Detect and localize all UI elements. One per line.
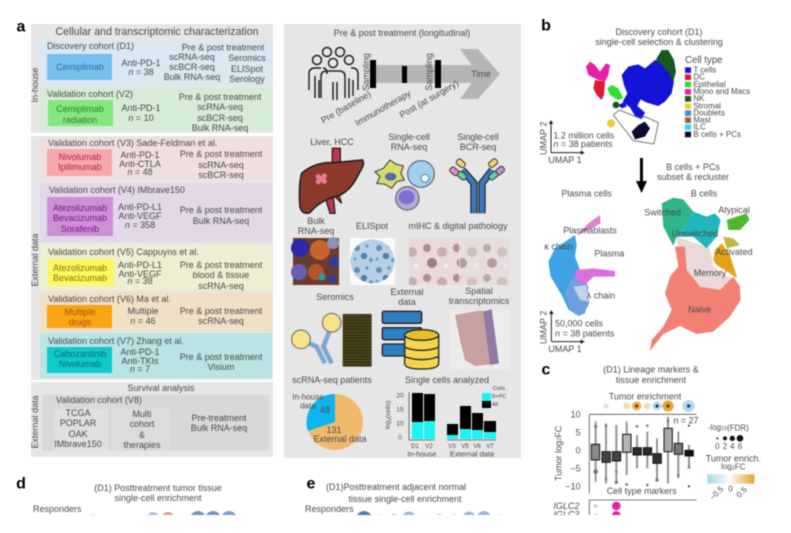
UMAP: discovery cohort clusters <box>586 50 676 144</box>
cohort V3: n = 48 <box>127 167 153 177</box>
assay labels lower: data <box>398 297 416 307</box>
cohort V5: n = 38 <box>127 276 153 286</box>
cohort V5: Bevacizumab <box>53 273 107 283</box>
cohort V6: Pre & post treatment <box>180 306 263 316</box>
panel label c: c <box>542 362 551 378</box>
cohort V3: scRNA-seq <box>198 160 244 170</box>
cohort D1: Seromics <box>228 53 266 63</box>
stacked bar chart: External data <box>450 450 495 458</box>
cohort V5: Pre & post treatment <box>180 260 263 270</box>
cell type markers dot plot: IGLC3 <box>553 509 579 519</box>
cohort V3: Ipilimumab <box>58 162 102 172</box>
cohort D1: Anti-PD-1 <box>121 58 161 68</box>
assay labels: mIHC & digital pathology <box>408 221 508 231</box>
cohort V6 <box>40 292 272 331</box>
UMAP: B cells: Unswitched <box>672 228 718 238</box>
heading: pre and post treatment: Pre & post treatment (longitudinal) <box>334 28 470 38</box>
cohort D1: Cemiplimab <box>56 62 104 72</box>
heading: cellular and transcriptomic characterization: Cellular and transcriptomic characterization <box>55 26 259 38</box>
cohort V2: n = 10 <box>128 113 154 123</box>
legend: FDR size and enrichment colour: Tumor enrich. <box>706 453 761 463</box>
subset and recluster label: B cells + PCs <box>666 162 720 172</box>
stacked bar chart: log <box>384 421 392 429</box>
legend: cell type: Mono and Macs <box>693 87 750 96</box>
panel: external data cohorts <box>30 136 273 380</box>
image: mIHC and digital pathology <box>409 238 510 285</box>
stacked bar chart: (cells) <box>384 401 392 418</box>
cohort V3: Anti-PD-1 <box>120 150 160 160</box>
panel: survival analysis: POPLAR <box>60 418 97 428</box>
legend: cell type: Mast <box>693 115 711 124</box>
stacked bar chart: V3 <box>448 444 456 450</box>
side label: in-house: In-house <box>30 67 40 103</box>
cohort V2: Validation cohort (V2) <box>47 89 133 99</box>
tumor enrichment dots <box>603 400 695 412</box>
cohort V7 <box>40 333 272 378</box>
panel label a: a <box>17 18 26 36</box>
panel c title: tissue enrichment <box>616 375 687 385</box>
legend: FDR size and enrichment colour: −0.5 <box>708 484 726 502</box>
pie chart: 131 <box>326 425 342 435</box>
cohort V4: Sorafenib <box>61 224 99 234</box>
icon: antibody <box>449 158 505 213</box>
cohort V4: Atezolizumab <box>53 203 107 213</box>
stacked bar chart: 15 <box>396 406 404 414</box>
UMAP axes: discovery cohort: UMAP 1 <box>548 155 582 165</box>
cohort V2: Anti-PD-1 <box>121 103 161 113</box>
cohort V2: Cemiplimab <box>56 104 104 114</box>
cohort V7: Pre & post treatment <box>180 352 263 362</box>
legend: FDR size and enrichment colour <box>706 423 761 502</box>
panel: longitudinal sampling and assays <box>284 24 521 458</box>
cohort V5: Anti-PD-L1 <box>118 260 162 270</box>
bar chart legend: B+PC <box>492 394 507 400</box>
UMAP axes: plasma cells: UMAP 2 <box>538 311 548 344</box>
UMAP: B cells: B cells <box>691 189 718 199</box>
panel d responders dots <box>33 504 237 527</box>
panel e title <box>326 482 466 504</box>
cohort D1: Pre & post treatment <box>182 42 265 52</box>
sampling labels: Pre (baseline) <box>319 89 373 125</box>
box plot: tumor log2FC: −5 <box>570 463 581 473</box>
stacked bar chart <box>384 386 507 458</box>
panel: survival analysis: Validation cohort (V8) <box>56 395 142 405</box>
cohort V4 <box>40 183 272 242</box>
UMAP: B cells <box>644 189 752 352</box>
UMAP axes: plasma cells <box>538 310 615 354</box>
panel b title <box>595 27 723 47</box>
legend: FDR size and enrichment colour: 0 <box>715 442 720 451</box>
assay labels lower <box>316 286 510 307</box>
bar chart legend: Cells <box>493 386 505 392</box>
cohort V3: Validation cohort (V3) Sade-Feldman et al. <box>48 138 217 148</box>
UMAP: plasma cells: Plasma <box>594 249 624 259</box>
panel: survival analysis: & <box>139 430 145 440</box>
panel: survival analysis: cohort <box>129 419 155 429</box>
cohort V2: scBCR-seq <box>197 113 243 123</box>
cell type markers dot plot: IGLC2 <box>553 501 579 511</box>
assay labels: BCR-seq <box>460 142 496 152</box>
UMAP axes: discovery cohort: UMAP 2 <box>538 122 548 155</box>
legend: FDR size and enrichment colour: 4 <box>730 442 735 451</box>
stacked bar chart: In-house <box>407 450 437 458</box>
time arrow: Time <box>471 69 491 79</box>
panel: survival analysis: External data <box>30 395 40 449</box>
stacked bar chart: V6 <box>473 444 481 450</box>
sampling labels <box>319 53 460 128</box>
legend: FDR size and enrichment colour: -log <box>708 423 721 432</box>
UMAP axes: discovery cohort: n = 38 patients <box>553 139 613 149</box>
cohort D1: Serology <box>229 74 265 84</box>
legend: cell type <box>685 55 750 139</box>
UMAP axes: plasma cells: 50,000 cells <box>555 318 603 328</box>
legend: FDR size and enrichment colour: 2 <box>732 465 735 471</box>
legend: FDR size and enrichment colour: FC <box>735 462 746 471</box>
assay labels <box>298 132 508 236</box>
image: spatial transcriptomics <box>450 309 510 369</box>
panel d title: (D1) Posttreatment tumor tissue <box>94 483 222 493</box>
panel d title: single-cell enrichment <box>114 493 202 503</box>
cohort V5: scRNA-seq <box>198 281 244 291</box>
assay labels lower: Seromics <box>316 292 354 302</box>
bar chart legend <box>482 386 507 408</box>
cohort V4: Bulk RNA-seq <box>193 216 249 226</box>
panel: survival analysis <box>30 382 273 457</box>
cohort D1: Bulk RNA-seq <box>164 72 220 82</box>
cohort V2 <box>40 88 272 133</box>
legend: FDR size and enrichment colour: 2 <box>723 442 728 451</box>
legend: cell type: Doublets <box>693 108 725 117</box>
stacked bar chart: 20 <box>396 392 404 400</box>
panel: survival analysis: Survival analysis <box>127 383 195 393</box>
heading: single cells analyzed: Single cells analyzed <box>405 375 489 385</box>
cohort D1: n = 38 <box>128 67 154 77</box>
assay labels lower: Spatial <box>465 286 493 296</box>
cohort V2: Pre & post treatment <box>179 92 262 102</box>
cohort V6: drugs <box>69 317 92 327</box>
panel label d: d <box>16 476 26 492</box>
cohort V6: Multiple <box>127 306 159 316</box>
panel: survival analysis: TCGA <box>65 408 91 418</box>
cell type markers dot plot <box>553 486 697 520</box>
legend: FDR size and enrichment colour: 0 <box>728 484 733 493</box>
legend: cell type: NK <box>693 94 705 103</box>
legend: FDR size and enrichment colour: log <box>721 462 732 471</box>
stacked bar chart: V5 <box>461 444 469 450</box>
panel c title: (D1) Lineage markers & <box>603 365 699 375</box>
image: ELISpot well <box>350 238 395 285</box>
panel e responders dots: Responders <box>305 504 354 514</box>
panel d title <box>94 483 222 503</box>
sampling labels: Sampling <box>424 53 434 91</box>
cohort V6: scRNA-seq <box>198 316 244 326</box>
UMAP: plasma cells: κ chain <box>544 241 573 251</box>
cohort D1: scBCR-seq <box>169 62 215 72</box>
bar chart legend: All <box>492 402 498 408</box>
cohort V5: Validation cohort (V5) Cappuyns et al. <box>48 247 199 257</box>
box plot: tumor log2FC: Tumor log <box>553 441 563 481</box>
cohort V5 <box>40 245 272 291</box>
arrow: subset to recluster <box>636 158 647 193</box>
box plot: tumor log2FC: −10 <box>565 482 581 492</box>
side label: external data: External data <box>30 233 40 287</box>
cohort V3: Anti-CTLA <box>119 159 161 169</box>
UMAP axes: plasma cells: n = 38 patients <box>555 328 615 338</box>
icon: single cells <box>375 160 434 210</box>
pie chart: In-house <box>292 392 324 402</box>
box plot: tumor log2FC: n = 27 <box>673 415 699 425</box>
sampling labels: Sampling <box>361 53 371 91</box>
cohort V4: n = 358 <box>125 220 155 230</box>
UMAP: plasma cells: Plasmablasts <box>563 225 617 235</box>
UMAP: plasma cells: Plasma cells <box>561 189 612 199</box>
UMAP: B cells: Switched <box>644 207 681 217</box>
assay labels: RNA-seq <box>391 142 427 152</box>
box plot: tumor log2FC: 0 <box>576 445 581 455</box>
icon: liver <box>299 148 363 213</box>
panel: survival analysis: therapies <box>123 440 161 450</box>
legend: FDR size and enrichment colour: 10 <box>721 426 727 432</box>
panel e responders dots <box>305 504 502 527</box>
legend: cell type: Stromal <box>693 101 721 110</box>
time arrow <box>370 49 500 99</box>
icon: external data servers and database <box>382 311 439 369</box>
panel: in-house cohorts <box>30 24 273 133</box>
cohort V7: Anti-TKIs <box>121 356 159 366</box>
panel: survival analysis: Multi <box>132 409 152 419</box>
box plot: tumor log2FC: 5 <box>576 427 581 437</box>
UMAP axes: discovery cohort: 1.2 million cells <box>553 131 615 141</box>
legend: FDR size and enrichment colour: 6 <box>738 442 743 451</box>
assay labels: Single-cell <box>457 132 499 142</box>
legend: cell type: Cell type <box>685 55 723 66</box>
box plot: tumor log2FC <box>553 409 699 493</box>
cell type markers dot plot: Cell type markers <box>607 486 677 496</box>
cohort V3: Nivolumab <box>59 152 101 162</box>
box plot: tumor log2FC: 10 <box>571 409 581 419</box>
pie chart: 48 <box>320 405 330 415</box>
box plot: tumor log2FC: FC <box>553 425 563 438</box>
cohort V6: Multiple <box>64 307 96 317</box>
subset and recluster label: subset & recluster <box>657 172 729 182</box>
UMAP: B cells: Naive <box>688 304 711 314</box>
panel c title: Tumor enrichment <box>609 391 682 401</box>
UMAP: B cells: Activated <box>715 247 752 257</box>
cohort D1: scRNA-seq <box>169 52 215 62</box>
icon: patient group <box>309 48 358 100</box>
sampling labels: Post (at surgery) <box>398 78 460 120</box>
legend: cell type: ILC <box>693 122 706 131</box>
image: bulk RNA-seq <box>291 237 339 285</box>
panel d responders dots: Responders <box>33 504 82 514</box>
cohort D1: ELISpot <box>231 64 264 74</box>
panel: survival analysis: OAK <box>68 429 88 439</box>
pie chart: External data <box>313 434 367 444</box>
UMAP axes: plasma cells: UMAP 1 <box>548 344 582 354</box>
panel b title: Discovery cohort (D1) <box>615 27 703 37</box>
cohort V4: Validation cohort (V4) IMbrave150 <box>49 185 185 195</box>
UMAP: plasma cells: λ chain <box>587 290 615 300</box>
stacked bar chart: V7 <box>486 444 494 450</box>
pie chart: data <box>300 402 316 410</box>
assay labels: ELISpot <box>356 221 389 231</box>
panel label b: b <box>541 18 551 34</box>
cohort D1 <box>40 41 272 85</box>
cohort V7: Anti-PD-1 <box>120 347 160 357</box>
cohort V5: blood & tissue <box>193 270 249 280</box>
legend: FDR size and enrichment colour: (FDR) <box>727 423 749 432</box>
box plot: tumor log2FC: 2 <box>557 438 563 441</box>
UMAP: B cells: Atypical <box>718 205 750 215</box>
panel: survival analysis: Pre-treatment <box>191 413 247 423</box>
subset and recluster label <box>657 162 729 182</box>
legend: cell type: Epithelial <box>693 80 726 89</box>
cohort V2: radiation <box>63 115 97 125</box>
cohort V5: Atezolizumab <box>53 263 107 273</box>
cohort D1: Discovery cohort (D1) <box>47 41 134 51</box>
assay labels lower: External <box>390 287 424 297</box>
stacked bar chart: 0 <box>398 434 402 442</box>
legend: cell type: B cells + PCs <box>693 130 741 139</box>
assay labels: Single-cell <box>388 132 430 142</box>
cohort V3: Pre & post treatment <box>180 149 263 159</box>
stacked bar chart: D1 <box>411 444 419 450</box>
panel b title: single-cell selection & clustering <box>595 37 723 47</box>
icon: seromics <box>292 313 372 367</box>
sampling labels: Immunotherapy <box>353 88 413 128</box>
cohort V3 <box>40 137 272 180</box>
cohort V6: n = 46 <box>130 316 156 326</box>
cohort V7: Validation cohort (V7) Zhang et al. <box>48 336 184 346</box>
UMAP axes: discovery cohort <box>538 120 615 165</box>
cohort V5: Anti-VEGF <box>118 269 162 279</box>
panel label e: e <box>307 476 316 492</box>
UMAP: B cells: Memory <box>694 268 727 278</box>
cohort V4: Anti-PD-L1 <box>118 202 162 212</box>
assay labels: Liver, HCC <box>310 137 354 147</box>
assay labels: Bulk <box>307 216 325 226</box>
cohort V4: Pre & post treatment <box>180 205 263 215</box>
panel e title: tissue single-cell enrichment <box>348 494 462 504</box>
cohort V7: Nivolumab <box>59 359 101 369</box>
legend: cell type: DC <box>693 72 705 81</box>
assay labels: RNA-seq <box>298 226 334 236</box>
cohort V7: Cabozantinib <box>54 349 106 359</box>
legend: FDR size and enrichment colour: 0.5 <box>735 485 749 499</box>
UMAP: plasma cells <box>544 189 624 316</box>
cohort V6: Validation cohort (V6) Ma et al. <box>48 294 171 304</box>
white cropping strip at the bottom of the page <box>0 515 791 533</box>
cohort V7: Visium <box>208 362 234 372</box>
cohort V4: Bevacizumab <box>53 213 107 223</box>
cohort V4: Anti-VEGF <box>118 211 162 221</box>
cohort V2: Bulk RNA-seq <box>192 123 248 133</box>
cohort V7: n = 7 <box>130 364 150 374</box>
stacked bar chart: V2 <box>425 444 433 450</box>
assay labels lower: transcriptomics <box>449 296 510 306</box>
cohort V2: scRNA-seq <box>197 102 243 112</box>
heading: scRNA-seq patients: scRNA-seq patients <box>292 375 372 385</box>
panel: survival analysis: IMbrave150 <box>54 439 102 449</box>
stacked bar chart: 2 <box>387 418 392 421</box>
panel: survival analysis: Bulk RNA-seq <box>191 423 247 433</box>
pie chart <box>292 392 367 450</box>
legend: cell type: T cells <box>693 65 716 74</box>
cohort V3: scBCR-seq <box>198 170 244 180</box>
panel e title: (D1)Posttreatment adjacent normal <box>326 482 466 492</box>
stacked bar chart: 10 <box>396 420 404 428</box>
panel c title <box>603 365 699 401</box>
